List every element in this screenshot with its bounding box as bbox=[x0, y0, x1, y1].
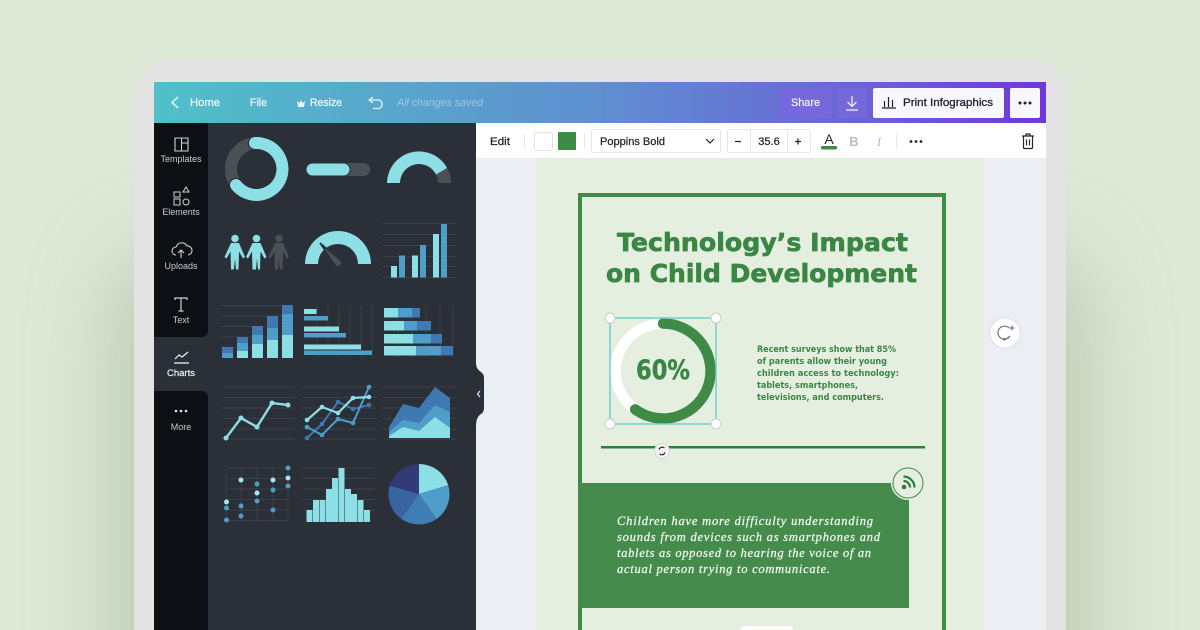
icon: back chevron bbox=[172, 97, 178, 108]
ring value: 60% bbox=[636, 355, 690, 386]
menu: Resize: Resize bbox=[310, 97, 342, 109]
tab: text: Text bbox=[173, 315, 190, 325]
title: on Child Development bbox=[606, 259, 917, 288]
icon: signal badge bbox=[891, 466, 925, 500]
page frame bbox=[580, 195, 944, 630]
element panel bbox=[208, 123, 476, 630]
survey paragraph: tablets, smartphones, bbox=[757, 380, 858, 391]
chart: scatter plot bbox=[224, 466, 290, 522]
button: more bbox=[1010, 88, 1040, 118]
green callout bbox=[578, 483, 909, 608]
survey paragraph: of parents allow their young bbox=[757, 356, 887, 367]
callout text: Children have more difficulty understanding bbox=[617, 514, 873, 528]
tab: uploads bbox=[164, 243, 198, 271]
chart: multi line bbox=[302, 385, 376, 440]
title bbox=[606, 228, 917, 288]
tab: charts bbox=[167, 352, 195, 379]
tool: edit: Edit bbox=[490, 136, 510, 148]
button: print infographics: Print Infographics bbox=[903, 97, 994, 109]
button: share bbox=[780, 88, 832, 118]
tab: text bbox=[173, 298, 190, 325]
menu: File: File bbox=[250, 97, 267, 109]
panel collapse tab bbox=[476, 363, 484, 426]
formatting toolbar bbox=[476, 123, 1046, 158]
status: all changes saved: All changes saved bbox=[396, 97, 484, 109]
text colour bbox=[821, 131, 837, 150]
bold: B bbox=[849, 134, 859, 149]
font selector: Poppins Bold bbox=[600, 136, 665, 148]
bottom white pill bbox=[741, 626, 793, 630]
divider line bbox=[601, 446, 925, 448]
chart: grouped columns bbox=[382, 224, 456, 278]
editor top bar bbox=[154, 82, 1046, 123]
active charts tab bbox=[154, 331, 208, 397]
chart: stacked horizontal bars bbox=[384, 306, 453, 358]
comment bubble button bbox=[990, 318, 1020, 348]
tab: templates: Templates bbox=[160, 154, 202, 164]
selection box bbox=[610, 318, 716, 424]
callout text: actual person trying to communicate. bbox=[617, 562, 830, 576]
tab: templates bbox=[160, 138, 202, 164]
canvas area bbox=[476, 158, 1046, 630]
callout text: tablets as opposed to hearing the voice of an bbox=[617, 546, 871, 560]
chart: pie bbox=[388, 464, 450, 525]
tab: charts: Charts bbox=[167, 368, 195, 379]
toolbar more bbox=[910, 140, 922, 143]
sidebar bbox=[154, 123, 208, 630]
tab: elements bbox=[162, 187, 200, 217]
button: share: Share bbox=[791, 97, 820, 109]
rotate handle bbox=[654, 444, 670, 458]
tablet bezel bbox=[134, 60, 1066, 630]
swatch: green bbox=[558, 132, 576, 150]
font size stepper: 35.6 bbox=[758, 136, 780, 148]
callout text: sounds from devices such as smartphones and bbox=[617, 530, 881, 544]
font size stepper bbox=[728, 130, 810, 152]
tab: uploads: Uploads bbox=[164, 261, 198, 271]
tab: more bbox=[171, 410, 191, 432]
chart: progress bar bbox=[306, 163, 370, 176]
italic: I bbox=[876, 134, 882, 149]
chart: people pictogram bbox=[224, 235, 289, 270]
title: Technology’s Impact bbox=[617, 228, 908, 257]
survey paragraph bbox=[757, 344, 899, 403]
icon: crown bbox=[297, 100, 305, 107]
tab: elements: Elements bbox=[162, 207, 200, 217]
ring chart 60% bbox=[605, 313, 721, 429]
button: print infographics bbox=[873, 88, 1004, 118]
text colour: A bbox=[824, 131, 834, 147]
icon: undo bbox=[369, 97, 382, 108]
tab: more: More bbox=[171, 422, 191, 432]
survey paragraph: televisions, and computers. bbox=[757, 392, 884, 403]
infographic page bbox=[536, 158, 984, 630]
chart: area bbox=[382, 387, 456, 439]
survey paragraph: Recent surveys show that 85% bbox=[757, 344, 896, 355]
chart: grouped horizontal bars bbox=[304, 306, 372, 358]
chart: single line bbox=[221, 387, 295, 440]
tablet shadow bbox=[120, 130, 1080, 630]
chart: histogram bbox=[303, 468, 375, 522]
chart: half gauge bbox=[387, 151, 451, 183]
swatch: white bbox=[534, 132, 552, 150]
icon: trash bbox=[1022, 134, 1034, 148]
font selector bbox=[592, 130, 720, 152]
chart: stacked columns bbox=[221, 305, 293, 358]
button: download bbox=[837, 88, 867, 118]
menu: Home: Home bbox=[190, 97, 220, 109]
chart: needle gauge bbox=[305, 231, 371, 267]
survey paragraph: children access to technology: bbox=[757, 368, 899, 379]
callout text bbox=[617, 514, 881, 576]
chart: donut bbox=[231, 143, 283, 195]
